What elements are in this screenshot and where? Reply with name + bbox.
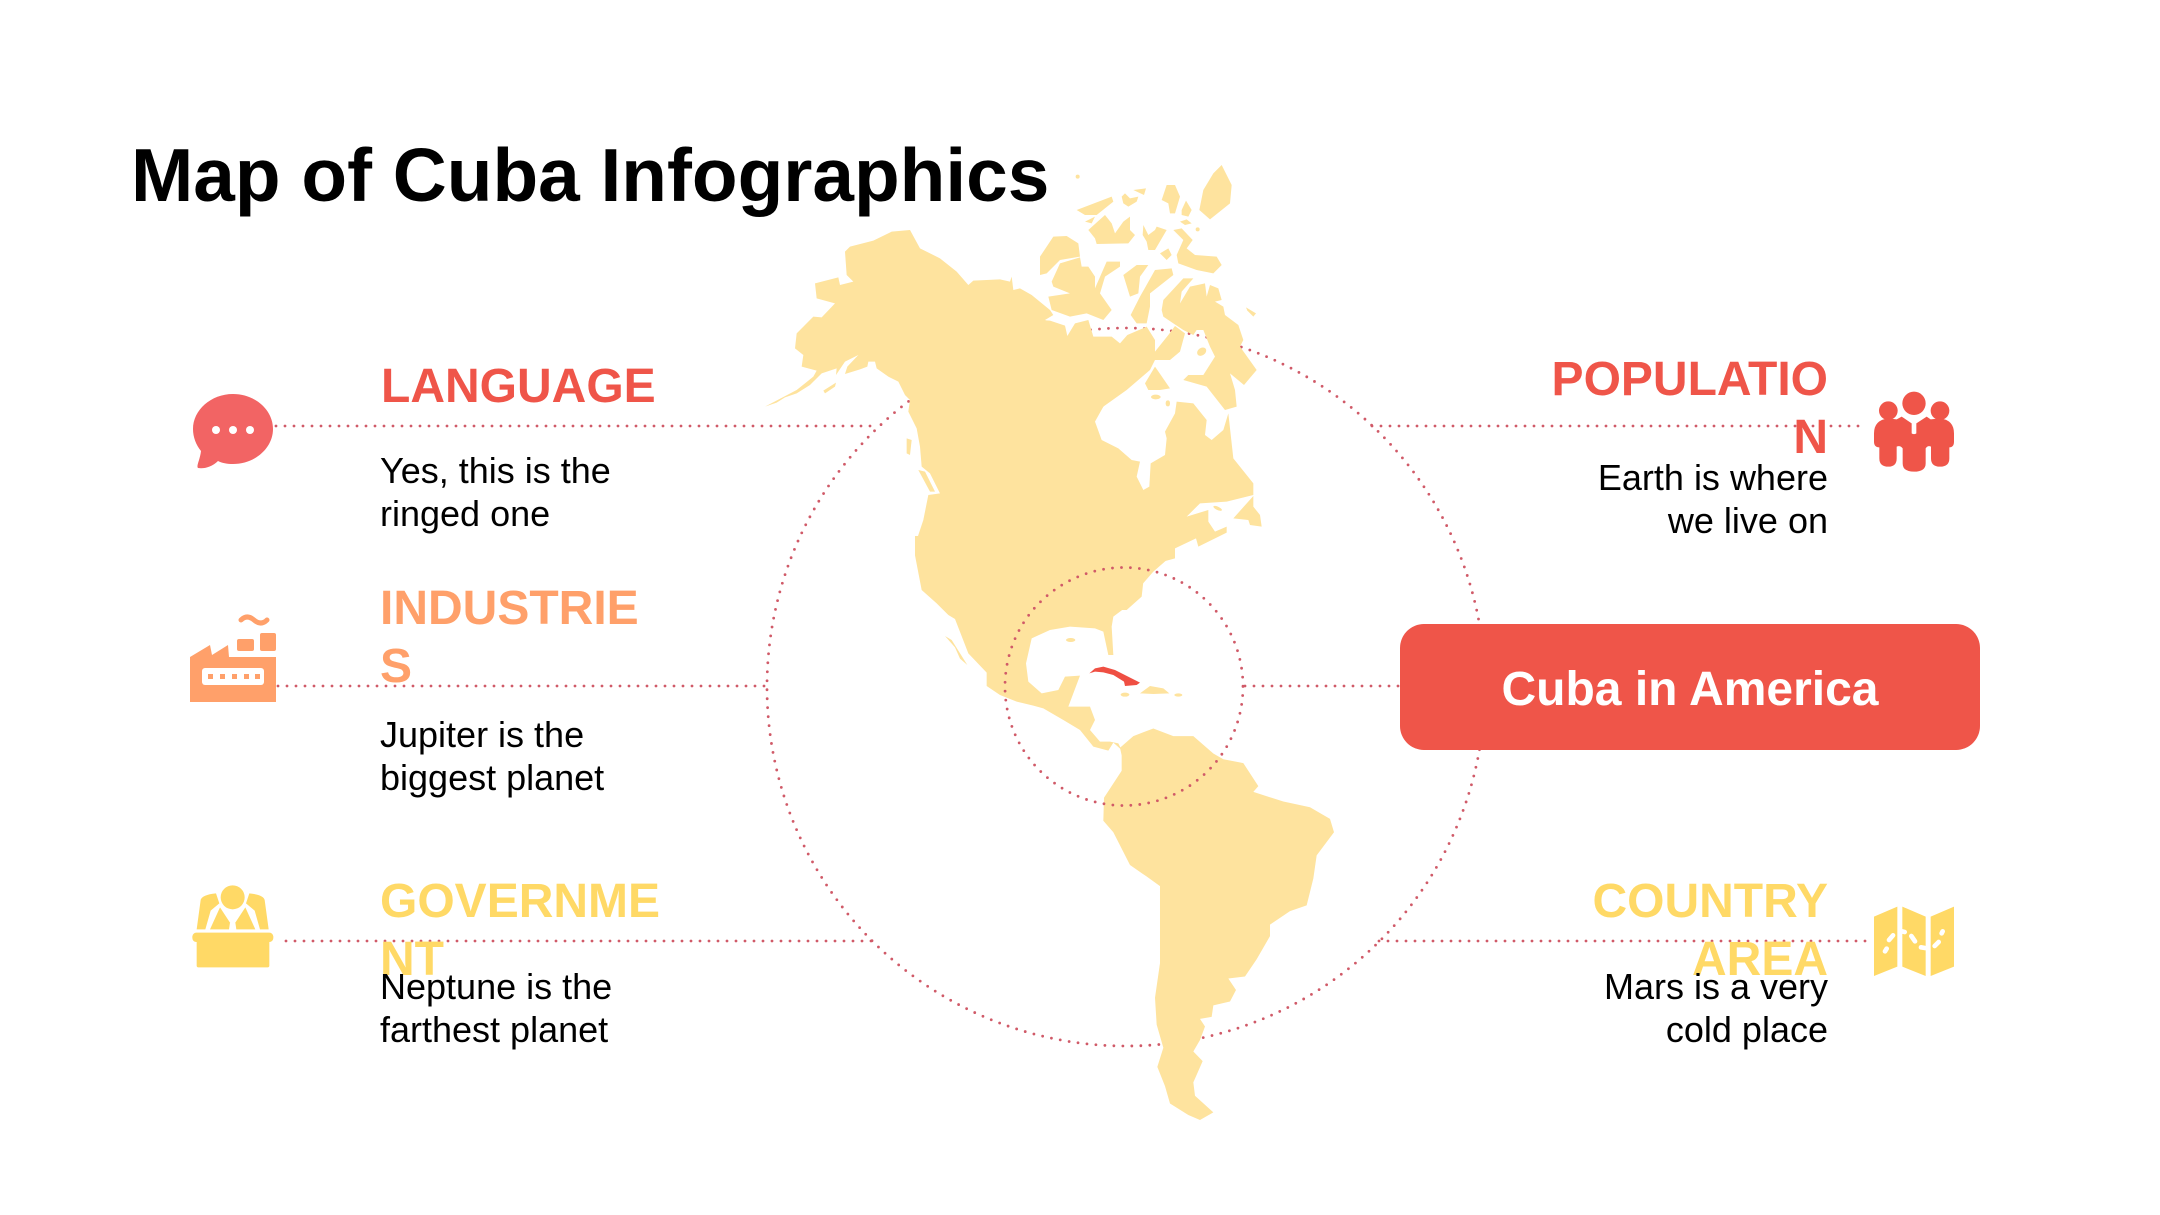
text: language body	[380, 450, 611, 534]
icon: government podium	[192, 885, 273, 967]
title: Map of Cuba Infographics	[131, 133, 1049, 217]
eastern Canada	[1060, 390, 1262, 610]
text: government body	[380, 966, 612, 1050]
Alaska and western Canada	[765, 230, 1060, 540]
connector lines	[276, 426, 1866, 941]
panel: industries heading: S	[380, 640, 412, 693]
northern mainland and Arctic islands	[1040, 165, 1257, 420]
text: population body: we live on	[1668, 500, 1828, 541]
panel: population heading: N	[1793, 411, 1828, 464]
text: country area body: Mars is a very	[1604, 966, 1828, 1007]
panel: government heading: GOVERNME	[380, 875, 660, 928]
text: government body: Neptune is the	[380, 966, 612, 1007]
panel: country area heading: COUNTRY	[1592, 875, 1828, 928]
icon: people group	[1874, 392, 1954, 472]
text: industries body: Jupiter is the	[380, 714, 584, 755]
map of the Americas	[765, 165, 1334, 1120]
Cuba highlighted	[1089, 667, 1140, 686]
panel: country area heading	[1592, 875, 1828, 986]
panel: industries heading	[380, 582, 639, 693]
icon: factory	[190, 617, 276, 702]
text: population body: Earth is where	[1598, 457, 1828, 498]
text: industries body: biggest planet	[380, 757, 604, 798]
panel: industries heading: INDUSTRIE	[380, 582, 639, 635]
South America	[1103, 728, 1334, 1120]
icon: folded map	[1874, 907, 1954, 976]
outer dotted ring	[767, 328, 1485, 1046]
United States, Mexico and Central America	[915, 536, 1182, 751]
panel: population heading	[1552, 353, 1828, 464]
panel: government heading: NT	[380, 933, 444, 986]
panel: population heading: POPULATIO	[1552, 353, 1828, 406]
panel: country area heading: AREA	[1692, 933, 1828, 986]
text: country area body: cold place	[1666, 1009, 1828, 1050]
text: industries body	[380, 714, 604, 798]
callout: Cuba in America	[1400, 624, 1980, 750]
inner dotted ring	[1005, 568, 1243, 806]
text: country area body	[1604, 966, 1828, 1050]
text: population body	[1598, 457, 1828, 541]
text: language body: ringed one	[380, 493, 550, 534]
text: government body: farthest planet	[380, 1009, 608, 1050]
icon: speech bubble	[193, 394, 273, 468]
callout: Cuba in America: Cuba in America	[1502, 663, 1878, 716]
text: language body: Yes, this is the	[380, 450, 611, 491]
panel: language heading: LANGUAGE	[381, 360, 656, 413]
panel: government heading	[380, 875, 660, 986]
